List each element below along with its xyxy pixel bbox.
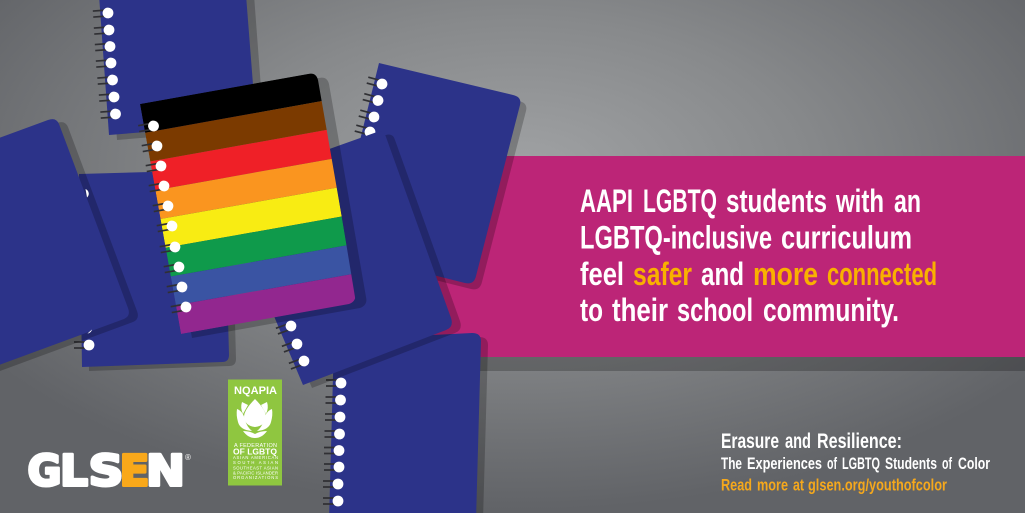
headline text: LGBTQ — [643, 183, 717, 219]
logo: NQAPIA — [228, 380, 282, 486]
logo: GLSEN: ® — [185, 453, 191, 462]
report credit text: Erasure — [721, 429, 779, 453]
logo: NQAPIA: & PACIFIC ISLANDER — [233, 470, 278, 476]
logo: NQAPIA: OF LGBTQ — [233, 448, 277, 456]
icon: lotus — [237, 399, 272, 438]
report credit text: at — [793, 476, 804, 494]
headline text: to — [580, 292, 603, 328]
report credit text: Experiences — [747, 455, 822, 473]
report credit text: The — [721, 455, 742, 473]
notebook: top — [93, 0, 264, 140]
logo: GLSEN: L — [60, 446, 88, 496]
logo: NQAPIA: ASIAN AMERICAN — [233, 455, 278, 460]
report credit text: Resilience: — [817, 429, 902, 453]
headline text: school — [677, 292, 753, 328]
report credit text: LGBTQ — [842, 455, 880, 473]
headline text: more — [753, 256, 818, 292]
headline text: community. — [763, 292, 899, 328]
report credit text: and — [785, 429, 811, 453]
headline text: safer — [633, 256, 692, 292]
headline text: their — [612, 292, 668, 328]
logo: NQAPIA: ORGANIZATIONS — [233, 475, 278, 480]
headline text: and — [701, 256, 744, 292]
notebook: upper right — [333, 63, 526, 289]
panel: magenta band — [430, 156, 1025, 371]
headline text: students — [726, 183, 827, 219]
logo: NQAPIA: SOUTHEAST ASIAN — [233, 466, 278, 470]
logo: NQAPIA: NQAPIA — [234, 385, 277, 397]
logo: GLSEN: G — [28, 446, 62, 496]
headline text: LGBTQ-inclusive — [580, 220, 772, 256]
logo: GLSEN: N — [146, 446, 185, 496]
logo: NQAPIA: SOUTH ASIAN — [233, 460, 278, 465]
report credit text: Read — [721, 476, 752, 494]
logo: NQAPIA: A FEDERATION — [234, 443, 277, 449]
report credit text: of — [942, 455, 952, 473]
notebook: far left — [0, 119, 138, 375]
report credit text: of — [827, 455, 837, 473]
notebook: bottom — [323, 333, 488, 513]
headline text — [580, 183, 937, 328]
white ring fragments — [86, 189, 92, 334]
notebook: lower left — [74, 170, 236, 371]
logo: GLSEN — [28, 446, 191, 496]
report credit text: Students — [885, 455, 937, 473]
report credit text: glsen.org/youthofcolor — [808, 476, 947, 494]
headline text: with — [835, 183, 884, 219]
headline text: AAPI — [580, 183, 633, 219]
notebook: rainbow cover — [138, 72, 366, 338]
logo: GLSEN: S — [88, 446, 124, 496]
logo: GLSEN: E — [120, 446, 150, 496]
headline text: connected — [827, 256, 937, 292]
report credit text: Color — [958, 455, 990, 473]
headline text: curriculum — [781, 220, 912, 256]
notebook: center tilted — [220, 132, 461, 388]
headline text: feel — [580, 256, 624, 292]
report credit text — [721, 429, 990, 494]
headline text: an — [894, 183, 921, 219]
report credit text: more — [757, 476, 788, 494]
